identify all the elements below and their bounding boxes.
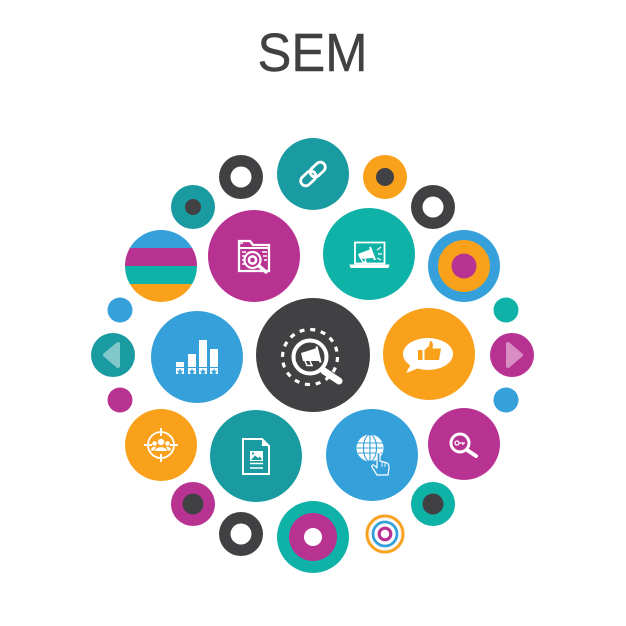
title: SEM (258, 23, 368, 83)
decorative dot: magenta bottom left (171, 482, 215, 526)
panel: global click (326, 409, 418, 501)
small dot: blue right (494, 388, 518, 412)
decorative dot: orange top (363, 155, 407, 199)
icon: bar chart with stars (176, 340, 218, 375)
icon: laptop with megaphone (350, 242, 389, 268)
decorative dot: teal top left (171, 185, 215, 229)
icon: magnifier with megaphone (282, 330, 339, 384)
panel: folder settings (208, 210, 300, 302)
small dot: green right (494, 298, 518, 322)
small dot: magenta left (108, 388, 132, 412)
icon: chain link (299, 160, 327, 188)
panel: center search marketing (256, 298, 370, 412)
panel: link (277, 138, 349, 210)
decorative concentric circle: blue orange magenta (428, 230, 500, 302)
decorative ring: dark top right (411, 185, 455, 229)
icon: magnifier with key (451, 434, 476, 456)
panel: document (210, 410, 302, 502)
arrow button: next (490, 333, 534, 377)
panel: keyword search (428, 408, 500, 480)
decorative dot: green bottom right (411, 482, 455, 526)
decorative ring: dark bottom (219, 512, 263, 556)
icon: folder with gear and magnifier (239, 241, 269, 272)
decorative target rings (364, 514, 406, 554)
panel: chart (151, 311, 243, 403)
icon: globe with pointing hand (356, 434, 389, 475)
panel: laptop advertising (323, 208, 415, 300)
decorative striped circle (125, 230, 197, 302)
panel: audience targeting (125, 409, 197, 481)
decorative concentric circle: teal magenta white (277, 501, 349, 573)
panel: social feedback (383, 308, 475, 400)
icon: document with image (243, 439, 269, 474)
arrow button: previous (91, 333, 135, 377)
small dot: blue left (108, 298, 132, 322)
icon: speech bubble with thumbs up (403, 338, 453, 373)
decorative ring: dark top left (219, 155, 263, 199)
icon: crosshair with people (144, 428, 178, 462)
